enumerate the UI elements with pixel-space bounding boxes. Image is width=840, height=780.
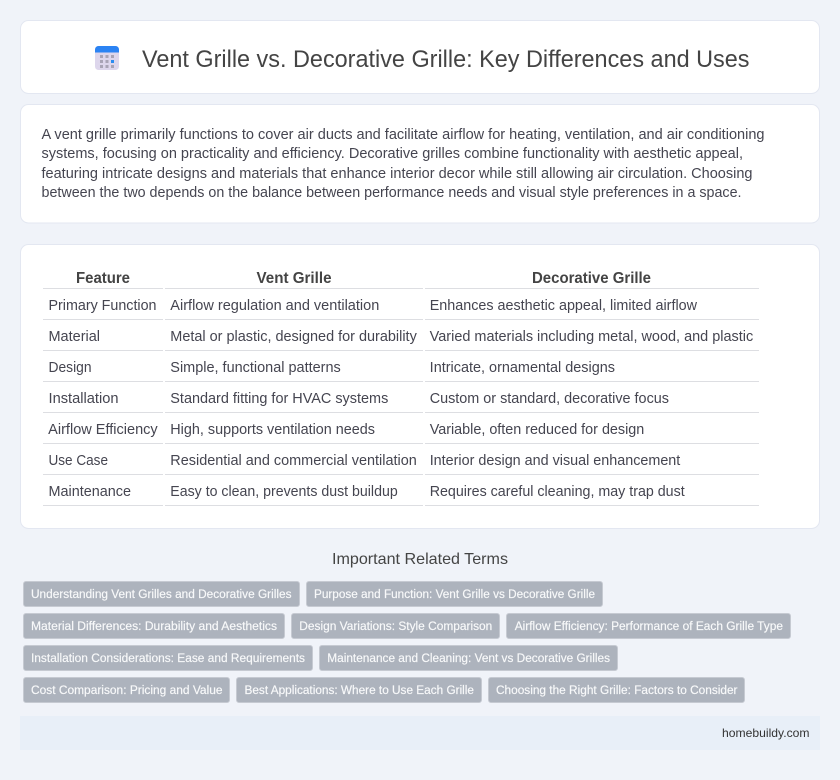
table header: Decorative Grille bbox=[532, 270, 651, 287]
row: use case: Interior design and visual enhancement bbox=[430, 453, 680, 469]
text block: introduction: featuring intricate designs and materials that enhance interior decor while still allowing air circulation. Choosing bbox=[42, 166, 752, 182]
tag: understanding: Understanding Vent Grilles and Decorative Grilles bbox=[31, 587, 292, 601]
row: installation: Custom or standard, decorative focus bbox=[430, 391, 669, 407]
icon: calendar grid bbox=[95, 46, 119, 70]
row: primary function bbox=[48, 298, 698, 314]
row: material: Metal or plastic, designed for durability bbox=[170, 329, 418, 345]
tag: choosing the right grille bbox=[488, 678, 744, 702]
row: material: Varied materials including metal, wood, and plastic bbox=[430, 329, 753, 345]
row: material bbox=[48, 329, 753, 345]
tag: cost comparison: Cost Comparison: Pricing and Value bbox=[31, 683, 223, 697]
tag: design variations bbox=[292, 614, 500, 638]
row: design: Design bbox=[48, 360, 92, 376]
tag list: related terms bbox=[24, 582, 790, 702]
tag: airflow efficiency: Airflow Efficiency: Performance of Each Grille Type bbox=[515, 619, 783, 633]
tag: cost comparison bbox=[24, 678, 230, 702]
tag: maintenance and cleaning: Maintenance and Cleaning: Vent vs Decorative Grilles bbox=[327, 651, 610, 665]
footer bbox=[20, 716, 820, 750]
row: airflow efficiency bbox=[48, 422, 644, 438]
row: installation: Installation bbox=[48, 391, 118, 407]
tag: installation considerations: Installation Considerations: Ease and Requirements bbox=[31, 651, 305, 665]
tag: purpose and function bbox=[306, 582, 602, 606]
tag: purpose and function: Purpose and Function: Vent Grille vs Decorative Grille bbox=[314, 587, 595, 601]
table header: Feature bbox=[76, 270, 130, 287]
panel: introduction bbox=[20, 104, 820, 223]
tag: understanding bbox=[24, 582, 300, 606]
row: use case: Use Case bbox=[48, 453, 108, 469]
tag: best applications: Best Applications: Where to Use Each Grille bbox=[244, 683, 474, 697]
panel: comparison table bbox=[20, 244, 820, 528]
text block: introduction bbox=[42, 127, 764, 201]
row: design: Intricate, ornamental designs bbox=[430, 360, 615, 376]
row: design: Simple, functional patterns bbox=[170, 360, 341, 376]
row: use case: Residential and commercial ventilation bbox=[170, 453, 417, 469]
row: airflow efficiency: Variable, often reduced for design bbox=[430, 422, 644, 438]
row: primary function: Airflow regulation and ventilation bbox=[170, 298, 379, 314]
tag: airflow efficiency bbox=[506, 614, 790, 638]
row: installation bbox=[48, 391, 669, 407]
row: maintenance: Maintenance bbox=[48, 484, 131, 500]
tag: material differences bbox=[24, 614, 284, 638]
title: Vent Grille vs. Decorative Grille: Key Differences and Uses bbox=[142, 46, 750, 73]
tag: installation considerations bbox=[24, 646, 312, 670]
tag: best applications bbox=[236, 678, 482, 702]
text block: introduction: A vent grille primarily functions to cover air ducts and facilitate airflow for heating, ventilation, and air conditioning bbox=[42, 127, 764, 143]
row: airflow efficiency: High, supports ventilation needs bbox=[170, 422, 375, 438]
row: maintenance bbox=[48, 484, 685, 500]
tag: maintenance and cleaning bbox=[320, 646, 618, 670]
text block: introduction: between the two depends on the balance between performance needs and visual style preferences in a space. bbox=[42, 185, 742, 201]
row: material: Material bbox=[48, 329, 100, 345]
footer: source: homebuildy.com bbox=[722, 726, 810, 740]
table header bbox=[76, 270, 651, 287]
table header: Vent Grille bbox=[256, 270, 332, 287]
tag: material differences: Material Differences: Durability and Aesthetics bbox=[31, 619, 277, 633]
tag: choosing the right grille: Choosing the Right Grille: Factors to Consider bbox=[496, 683, 738, 697]
row: primary function: Primary Function bbox=[48, 298, 156, 314]
row: airflow efficiency: Airflow Efficiency bbox=[48, 422, 159, 438]
row: design bbox=[48, 360, 615, 376]
row: maintenance: Easy to clean, prevents dust buildup bbox=[170, 484, 398, 500]
row: primary function: Enhances aesthetic appeal, limited airflow bbox=[430, 298, 698, 314]
row: use case bbox=[48, 453, 680, 469]
heading: important related terms: Important Related Terms bbox=[332, 551, 508, 568]
row: maintenance: Requires careful cleaning, may trap dust bbox=[430, 484, 685, 500]
panel: header bbox=[20, 20, 820, 94]
tag: design variations: Design Variations: Style Comparison bbox=[299, 619, 492, 633]
text block: introduction: systems, focusing on practicality and efficiency. Decorative grilles combine functionality with aesthetic appeal, bbox=[42, 146, 743, 162]
row: installation: Standard fitting for HVAC systems bbox=[170, 391, 388, 407]
